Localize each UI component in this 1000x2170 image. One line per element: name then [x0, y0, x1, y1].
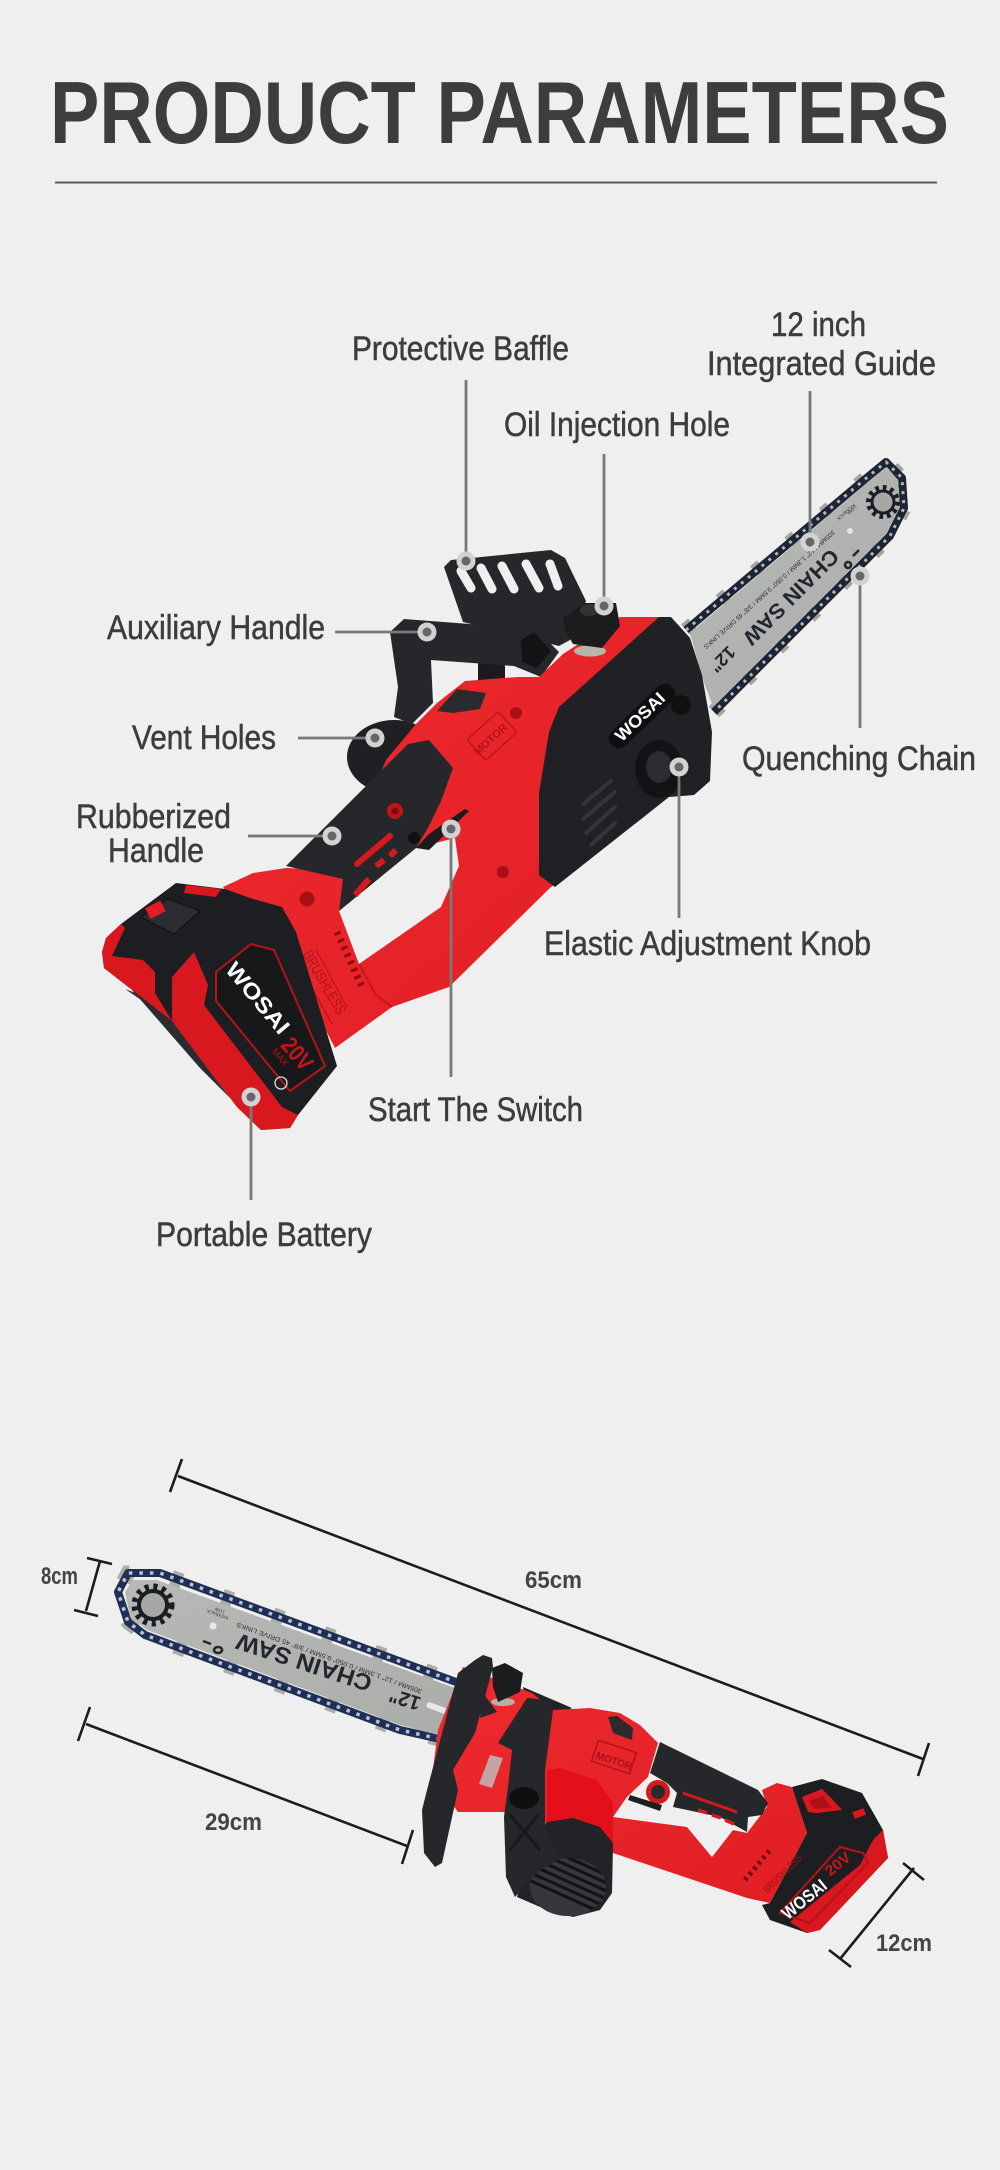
dimension: 29cm: [78, 1707, 413, 1864]
guide bar and chain: 12": [387, 1683, 424, 1714]
label: start the switch: [368, 820, 583, 1129]
handle opening: [339, 838, 459, 964]
brushless text: BRUSHLESS: [762, 1852, 805, 1896]
battery: WOSAI: [221, 957, 295, 1039]
guide bar and chain: [686, 462, 904, 712]
label: portable battery: [156, 1088, 372, 1254]
dimension: 8cm: 8cm: [41, 1563, 78, 1590]
battery: 20V: [822, 1849, 854, 1880]
dimension: 65cm: [170, 1459, 929, 1776]
motor badge: [467, 707, 522, 878]
label: elastic adjustment knob: [544, 758, 871, 963]
label: quenching chain: Quenching Chain: [742, 740, 976, 778]
black chain cover: WOSAI: [611, 689, 669, 745]
guide bar and chain: 12": [705, 642, 739, 676]
red body: [432, 1667, 807, 1903]
label: protective baffle: Protective Baffle: [352, 330, 569, 368]
rear cover strip: [523, 1687, 572, 1715]
shoulder pad: [437, 689, 486, 713]
oil cap: [563, 603, 620, 656]
motor badge: MOTOR: [472, 722, 510, 758]
motor badge: [592, 1716, 636, 1774]
guide bar and chain: [118, 1573, 456, 1739]
label: quenching chain: [742, 566, 976, 778]
battery: [762, 1779, 888, 1933]
guide bar and chain: CHAIN SAW: [233, 1628, 375, 1697]
label: 12 inch integrated guide: Integrated Guide: [707, 345, 936, 383]
dimension: 65cm: 65cm: [525, 1567, 582, 1594]
guide bar and chain: KICKBACK: [206, 1608, 229, 1621]
label: elastic adjustment knob: Elastic Adjustment Knob: [544, 925, 871, 963]
guide bar and chain: 305MM / 12" 1.3MM / 0.050" 9.5MM / 3/8" 45 DRIVE LINKS: [702, 528, 836, 650]
guide bar and chain: CHAIN SAW: [738, 544, 843, 649]
auxiliary handle: [390, 619, 559, 724]
label: rubberized handle: Rubberized: [76, 798, 231, 836]
label: oil injection hole: [504, 406, 730, 616]
baffle: [422, 1655, 503, 1867]
label: vent holes: Vent Holes: [132, 719, 276, 757]
red main body: [223, 617, 700, 1048]
chainsaw product photo: top view: [102, 462, 904, 1130]
oil cap: [491, 1663, 523, 1706]
label: rubberized handle: Handle: [108, 832, 204, 870]
label: rubberized handle: [76, 798, 342, 870]
label: start the switch: Start The Switch: [368, 1091, 583, 1129]
motor and fan grille: [517, 1768, 620, 1921]
rubberized handle: [646, 1742, 768, 1832]
label: vent holes: [132, 719, 384, 757]
label: portable battery: Portable Battery: [156, 1216, 372, 1254]
protective baffle: [444, 550, 586, 646]
guide bar and chain: 305MM / 12" 1.3MM / 0.050" 9.5MM / 3/8" 45 DRIVE LINKS: [235, 1620, 423, 1694]
black chain cover: [539, 617, 712, 887]
handle opening: [623, 1798, 747, 1857]
brushless text: [745, 1850, 805, 1896]
dimension: 8cm: [41, 1558, 112, 1616]
brushless housing details: [299, 892, 363, 1024]
guide bar and chain: KICKBACK: [836, 503, 856, 522]
chainsaw product photo: dimension view: [118, 1573, 888, 1933]
battery: WOSAI: [778, 1875, 831, 1923]
label: auxiliary handle: Auxiliary Handle: [107, 609, 325, 647]
trigger guard: [628, 1795, 662, 1811]
label: 12 inch integrated guide: 12 inch: [771, 306, 866, 344]
dimension: 12cm: [829, 1863, 932, 1967]
guide bar and chain: LOW: [213, 1606, 225, 1615]
label: oil injection hole: Oil Injection Hole: [504, 406, 730, 444]
motor badge: MOTOR: [594, 1751, 634, 1773]
label: protective baffle: [352, 330, 569, 570]
rear housing seam: [359, 964, 392, 1007]
guide bar and chain: LOW: [846, 505, 857, 516]
dimension: 12cm: 12cm: [876, 1930, 932, 1957]
battery: [102, 883, 337, 1130]
dimension: 29cm: 29cm: [205, 1809, 262, 1836]
auxiliary handle: [498, 1698, 562, 1897]
motor housing: [347, 720, 441, 794]
label: 12 inch integrated guide: [707, 306, 936, 552]
brushless housing details: BRUSHLESS: [299, 948, 349, 1018]
rubberized handle: [286, 740, 469, 911]
battery: 20V: [275, 1032, 318, 1076]
battery: MAX: [270, 1046, 290, 1068]
